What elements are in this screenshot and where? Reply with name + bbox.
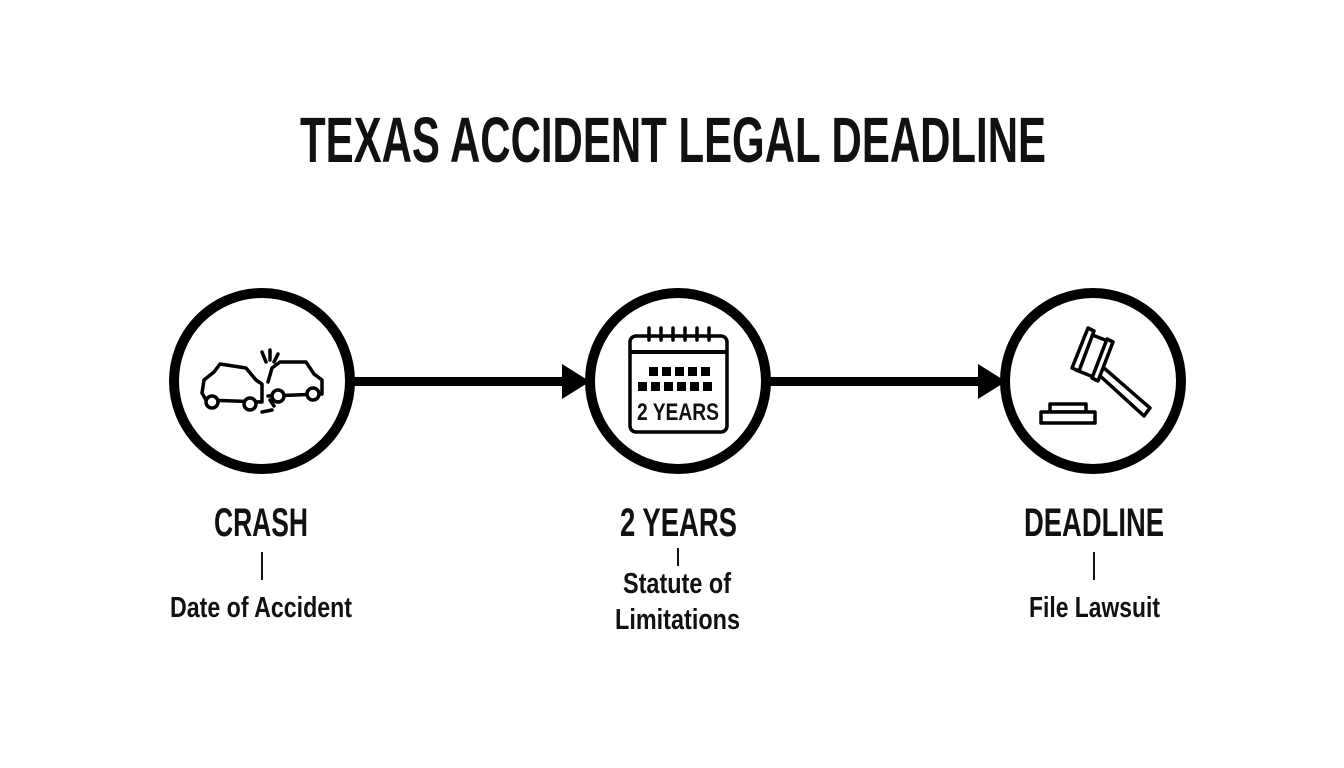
arrow: 2 years to deadline xyxy=(770,364,1006,399)
label: 2 YEARS: 2 YEARS xyxy=(620,501,737,545)
step: deadline xyxy=(1005,293,1181,624)
icon circle: car crash xyxy=(174,293,350,469)
subtext: date of accident: Date of Accident xyxy=(170,592,352,624)
subtext: statute of limitations: Statute of xyxy=(623,568,731,600)
divider xyxy=(677,548,679,566)
divider xyxy=(1093,552,1095,580)
subtext: statute of limitations: Limitations xyxy=(615,604,740,636)
label: DEADLINE: DEADLINE xyxy=(1024,501,1164,545)
subtext: statute of limitations xyxy=(615,568,740,636)
step: 2 years xyxy=(590,293,766,636)
step: crash xyxy=(170,293,352,624)
label: CRASH: CRASH xyxy=(214,501,308,545)
divider xyxy=(261,552,263,580)
arrow: crash to 2 years xyxy=(354,364,590,399)
icon circle: calendar xyxy=(590,293,766,469)
icon circle: gavel xyxy=(1005,293,1181,469)
icon circle: calendar: 2 YEARS xyxy=(637,399,719,426)
subtext: file lawsuit: File Lawsuit xyxy=(1029,592,1160,624)
